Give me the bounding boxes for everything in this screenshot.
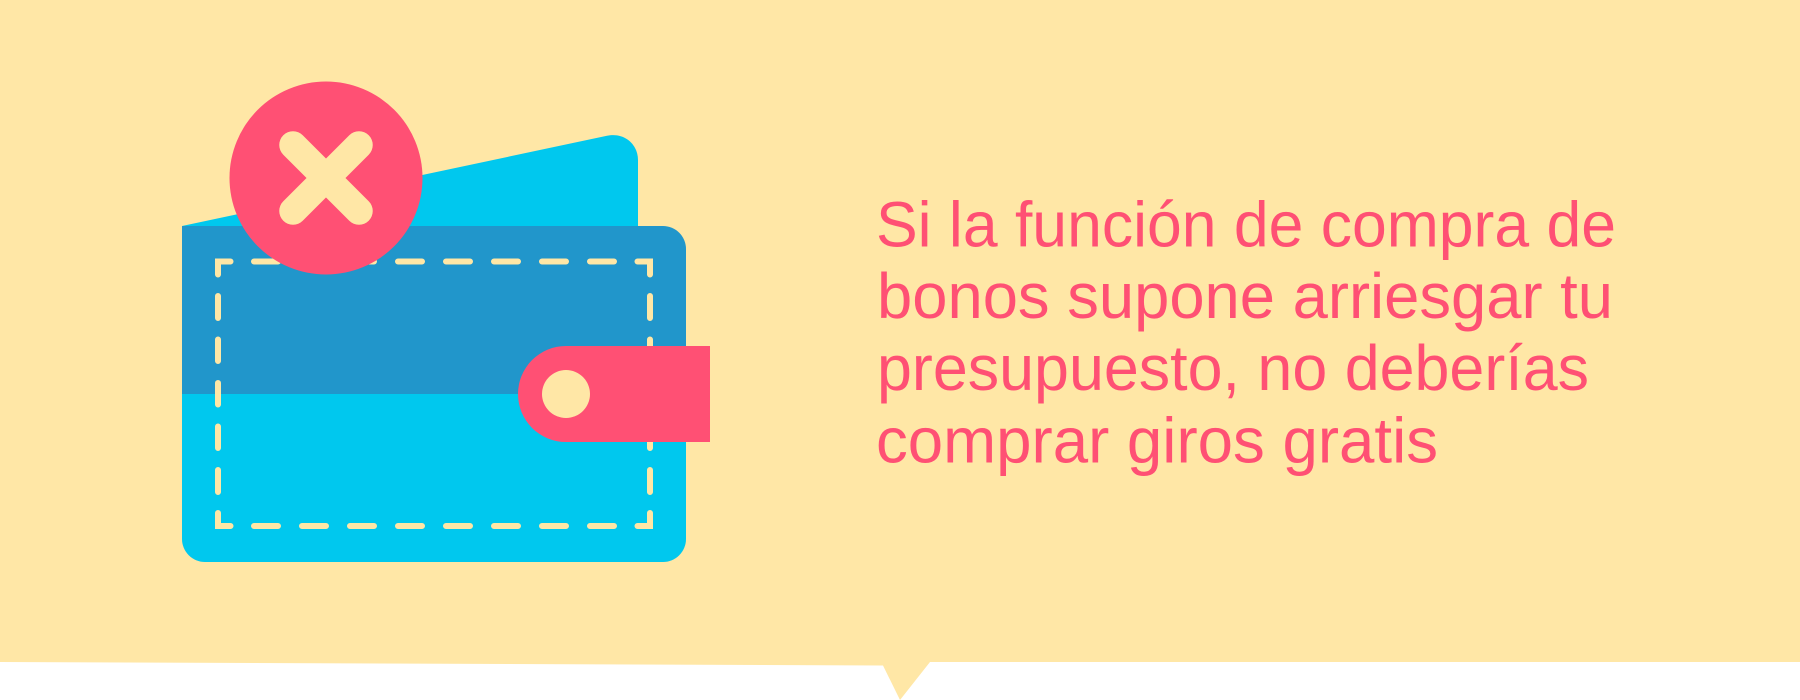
wallet clasp (518, 346, 710, 442)
text block: message: bonos supone arriesgar tu (877, 260, 1613, 332)
wallet back flap (182, 135, 638, 226)
wallet stitching (218, 262, 650, 526)
error badge circle (230, 82, 422, 274)
icon: wallet with error badge (182, 82, 710, 562)
wallet upper body (182, 226, 686, 394)
text block: message (876, 188, 1616, 476)
clasp button (542, 370, 590, 418)
text block: message: presupuesto, no deberías (877, 332, 1589, 404)
wallet lower body (182, 393, 686, 562)
text block: message: Si la función de compra de (876, 188, 1616, 260)
error badge cross (293, 145, 359, 211)
text block: message: comprar giros gratis (876, 404, 1438, 476)
